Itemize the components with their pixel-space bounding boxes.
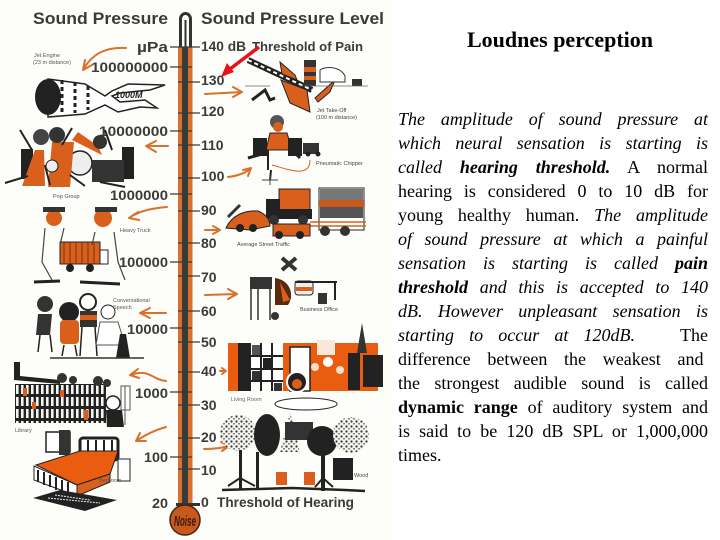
illustration: jet take-off: Jet Take-Off [317, 108, 347, 114]
illustration: jet take-off: (100 m distance) [316, 115, 357, 121]
illustration: street traffic: Average Street Traffic [237, 242, 290, 248]
illustration: truck and two men [34, 207, 151, 284]
heading: sound pressure: Sound Pressure [33, 9, 168, 28]
left scale: micropascals: 20 [152, 495, 168, 511]
right scale: decibels: 90 [201, 202, 217, 218]
body text: which neural sensation is starting is [398, 133, 708, 153]
right scale: decibels: 130 [201, 72, 225, 88]
illustration: truck and two men: Heavy Truck [120, 228, 151, 234]
body text: hearing is considered 0 to 10 dB for [398, 181, 708, 201]
illustration: pop group [5, 127, 134, 200]
left scale: micropascals [91, 39, 169, 511]
body text: difference between the weakest and [398, 349, 704, 369]
right scale: decibels: 70 [201, 269, 217, 285]
scale ticks [170, 47, 200, 469]
illustration: living room [228, 323, 383, 410]
illustration: conversational speech: Conversational [113, 298, 150, 304]
illustration: jet engine: Jet Engine [34, 53, 60, 59]
icon: noise bulb [170, 505, 200, 535]
body text: threshold and this is accepted to 140 [398, 277, 708, 297]
illustration: library [14, 362, 130, 434]
body text: sensation is starting is called pain [398, 253, 708, 273]
right scale: decibels: Threshold of Hearing [217, 494, 354, 510]
body text [398, 109, 708, 465]
left scale: micropascals: 100000 [119, 254, 168, 270]
body text: the strongest audible sound is called [398, 373, 708, 393]
illustration: jet take-off [245, 60, 368, 121]
right scale: decibels: 30 [201, 397, 217, 413]
red arrow [221, 47, 259, 77]
left scale: micropascals: µPa [137, 39, 169, 56]
left scale: micropascals: 1000000 [110, 187, 168, 203]
right scale: decibels: Threshold of Pain [252, 39, 363, 54]
body text: of sound pressure at which a painful [398, 229, 708, 249]
right scale: decibels: 100 [201, 168, 225, 184]
orange arrows [83, 48, 251, 451]
illustration: bedroom [33, 430, 130, 511]
left scale: micropascals: 1000 [135, 385, 168, 401]
body text: dB. However unpleasant sensation is [398, 301, 708, 321]
illustration: conversational speech: Speech [113, 305, 132, 311]
body text: starting to occur at 120dB. The [398, 325, 708, 345]
illustration: jet engine [33, 53, 165, 117]
illustration: bedroom: Bedroom [99, 478, 122, 484]
right scale: decibels: 60 [201, 303, 217, 319]
right scale: decibels [201, 38, 363, 510]
illustration: living room: Living Room [231, 397, 262, 403]
title: Loudnes perception [467, 27, 653, 52]
heading: sound pressure level: Sound Pressure Level [201, 9, 384, 28]
illustration: street traffic [226, 188, 366, 248]
right scale: decibels: 120 [201, 103, 225, 119]
illustration: conversational speech [36, 294, 150, 358]
left scale: micropascals: 100 [144, 449, 168, 465]
right scale: decibels: 10 [201, 462, 217, 478]
illustration: pop group: Pop Group [53, 194, 80, 200]
right scale: decibels: 50 [201, 334, 217, 350]
illustration: pneumatic chipper [248, 115, 363, 185]
illustration: business office: Business Office [300, 307, 338, 313]
left scale: micropascals: 10000 [127, 321, 168, 337]
right scale: decibels: 80 [201, 235, 217, 251]
left scale: micropascals: 100000000 [91, 59, 168, 75]
illustration: wood: Wood [354, 473, 368, 479]
illustration: wood [220, 412, 369, 491]
icon: noise bulb: Noise [174, 513, 196, 530]
left scale: micropascals: 10000000 [99, 123, 168, 139]
body text: times. [398, 445, 442, 465]
body text: The amplitude of sound pressure at [398, 109, 708, 129]
illustration: jet engine: 1000M [115, 90, 143, 100]
body text: called hearing threshold. A normal [398, 157, 708, 177]
body text: dynamic range of auditory system and [398, 397, 708, 417]
body text: is said to be 120 dB SPL or 1,000,000 [398, 421, 708, 441]
illustration: pneumatic chipper: Pneumatic Chipper [316, 161, 363, 167]
sound pressure level chart [4, 9, 384, 536]
illustration: business office [250, 258, 338, 320]
right scale: decibels: 140 dB [201, 38, 246, 54]
illustration: jet engine: (23 m distance) [33, 60, 71, 66]
right scale: decibels: 40 [201, 363, 217, 379]
illustration: library: Library [15, 428, 32, 434]
right scale: decibels: 0 [201, 494, 209, 510]
thermometer [176, 14, 200, 506]
right scale: decibels: 110 [201, 137, 224, 153]
right scale: decibels: 20 [201, 429, 217, 445]
body text: young healthy human. The amplitude [398, 205, 708, 225]
